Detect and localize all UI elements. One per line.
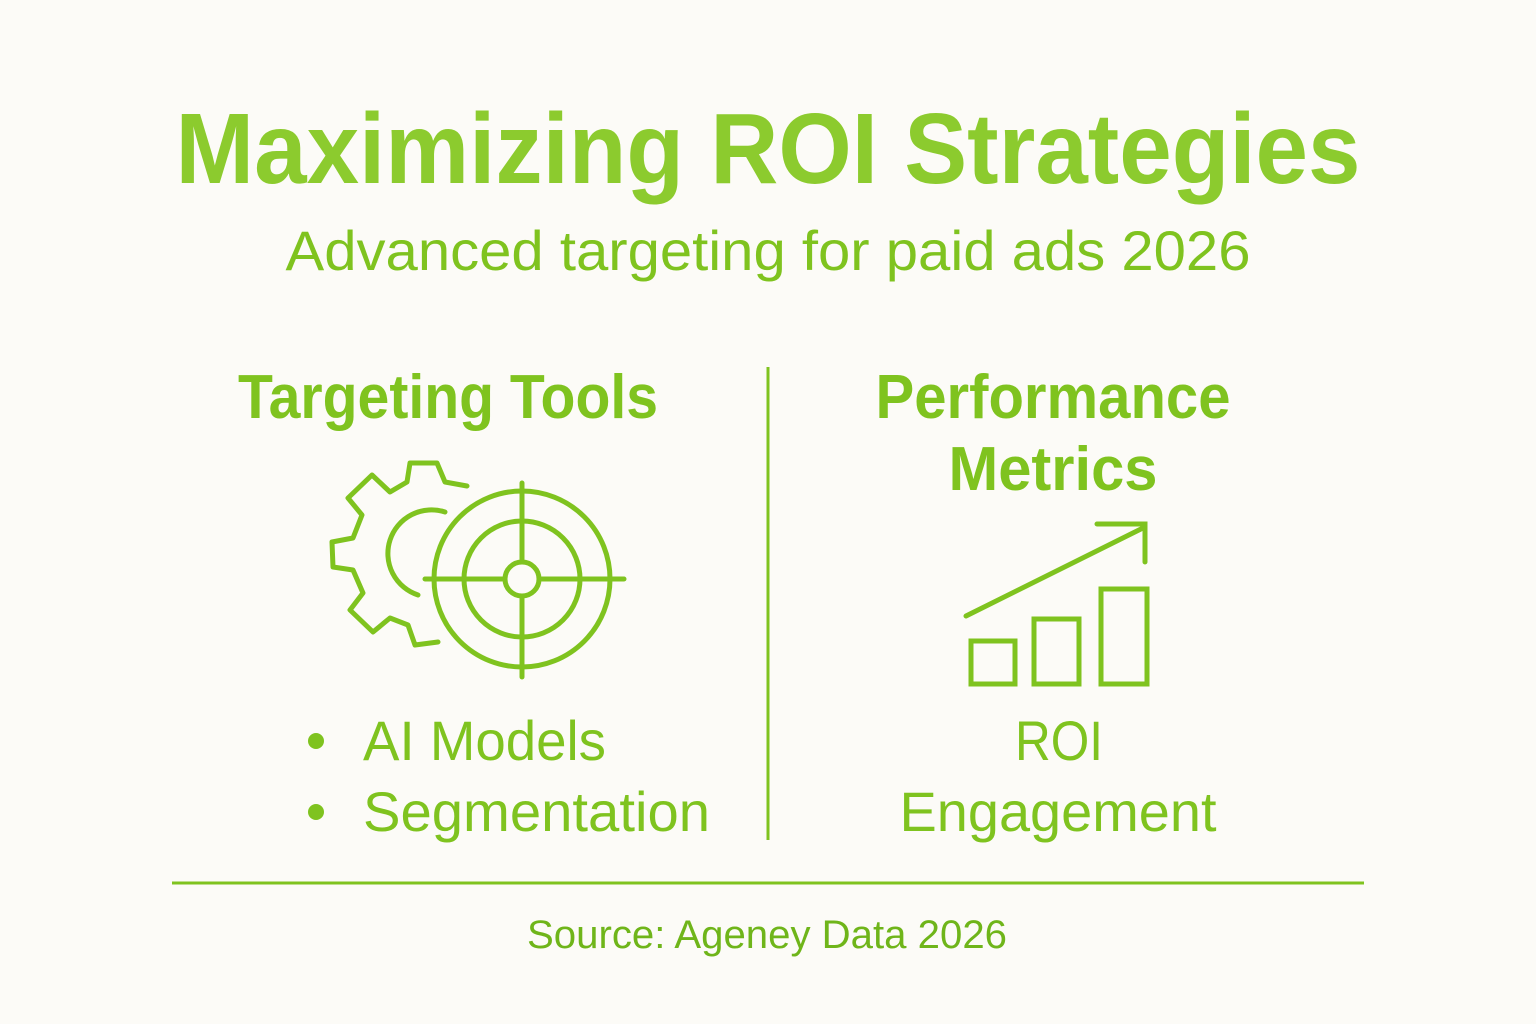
bullet list <box>308 709 710 843</box>
panel: performance metrics <box>876 363 1230 843</box>
divider vertical <box>766 367 770 840</box>
heading: performance metrics: Performance <box>876 363 1230 432</box>
panel: targeting tools <box>238 363 710 843</box>
divider horizontal <box>172 882 1364 884</box>
heading: targeting tools: Targeting Tools <box>238 363 658 432</box>
metrics list <box>900 709 1217 843</box>
subtitle: Advanced targeting for paid ads 2026 <box>286 219 1250 282</box>
source note: Source: Ageney Data 2026 <box>527 913 1007 957</box>
icon: bar chart with arrow <box>966 524 1147 684</box>
metrics list: Engagement <box>900 780 1217 843</box>
panel: performance metrics: Metrics <box>948 435 1158 504</box>
metrics list: ROI <box>1015 709 1103 772</box>
icon: gear and target <box>332 463 624 677</box>
title: Maximizing ROI Strategies <box>176 93 1360 205</box>
bullet list: Segmentation <box>363 780 710 843</box>
bullet list: AI Models <box>363 709 606 772</box>
